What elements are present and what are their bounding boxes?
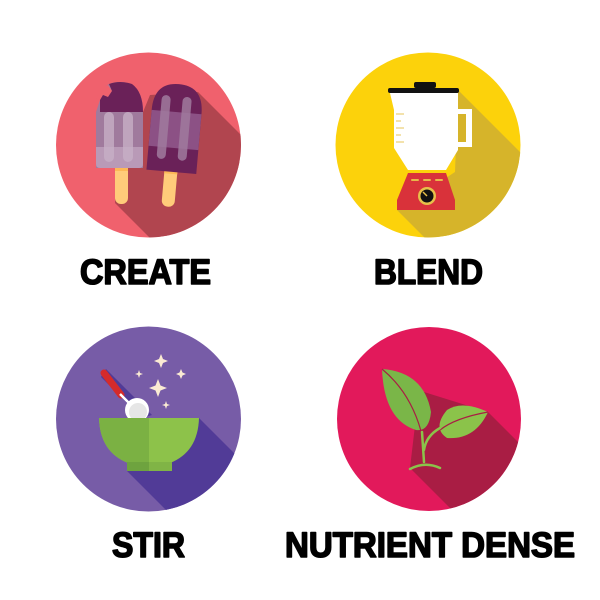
circle: nutrient background	[337, 327, 521, 511]
icon: spoon	[104, 373, 149, 422]
icon: popsicles	[96, 82, 204, 209]
shadow: blend	[397, 91, 520, 238]
icon: sparkles	[135, 354, 186, 409]
circle: blend background	[336, 52, 520, 238]
panel: nutrient dense	[337, 327, 521, 511]
label: NUTRIENT DENSE: NUTRIENT DENSE	[285, 526, 575, 565]
label: BLEND: BLEND	[374, 253, 483, 292]
shadow: create	[115, 92, 241, 238]
icon: blender	[388, 82, 472, 210]
panel: stir	[56, 326, 241, 512]
label: STIR: STIR	[112, 526, 185, 565]
icon: plant	[382, 369, 488, 469]
panel: blend	[336, 52, 520, 238]
circle: create background	[56, 52, 241, 238]
panel: create	[56, 52, 241, 238]
circle: stir background	[56, 326, 241, 512]
shadow: stir	[101, 369, 234, 510]
shadow: nutrient	[410, 392, 518, 508]
icon: bowl	[99, 418, 199, 471]
label: CREATE: CREATE	[80, 253, 211, 292]
